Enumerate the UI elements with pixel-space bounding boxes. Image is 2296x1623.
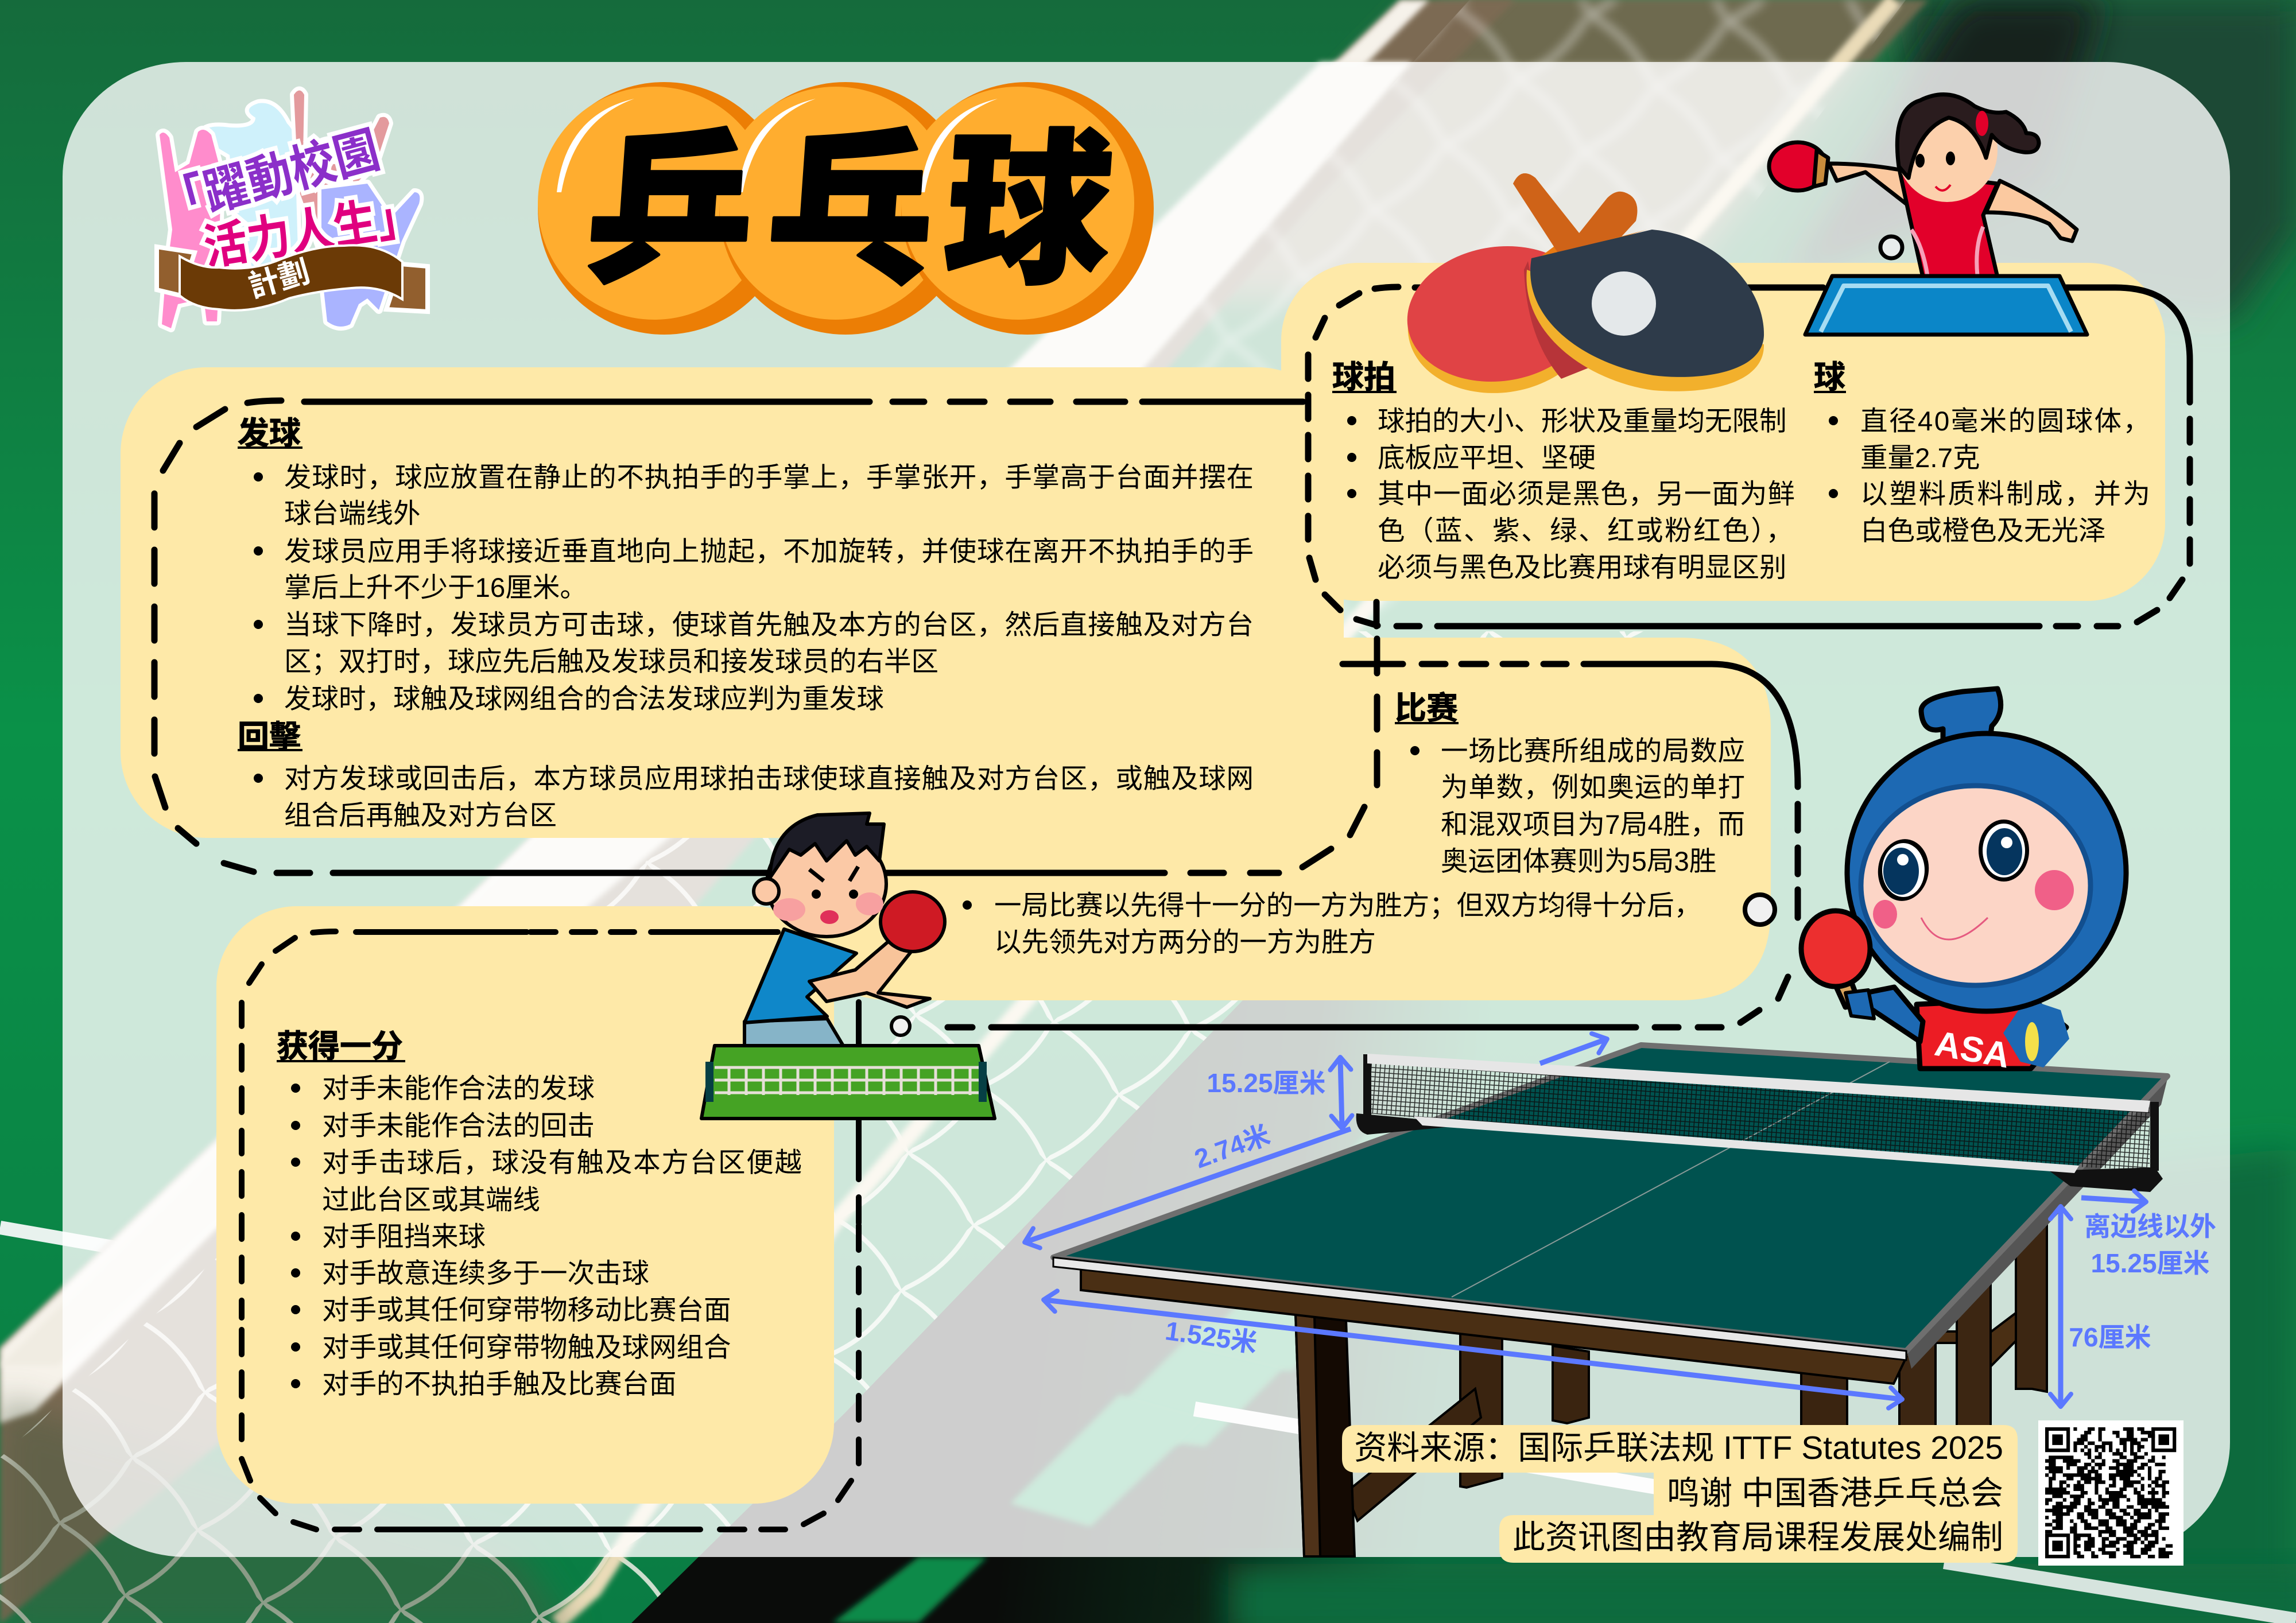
point rules list (291, 1074, 802, 1400)
ball (891, 1017, 910, 1035)
label: 1.525 m: 1.525米 (1163, 1315, 1259, 1358)
text block: racket (1332, 359, 1795, 583)
boy's arm (809, 935, 930, 1007)
table apron (1081, 1265, 1906, 1384)
label: 15.25 cm: 15.25厘米 (1207, 1068, 1326, 1098)
title text: 球 (940, 119, 1118, 304)
serve rules list: 发球员应用手将球接近垂直地向上抛起，不加旋转，并使球在离开不执拍手的手 (284, 537, 1254, 567)
return rules list: 对方发球或回击后，本方球员应用球拍击球使球直接触及对方台区，或触及球网 (284, 764, 1254, 794)
credits text: 鸣谢 中国香港乒乓总会 (1667, 1475, 2003, 1512)
mascot paddle (1801, 911, 1874, 1019)
centre line (1452, 1062, 1890, 1297)
match rules list: 一局比赛以先得十一分的一方为胜方；但双方均得十分后， (994, 891, 1701, 921)
mascot sleeve (2003, 999, 2069, 1067)
arrow: net overhang (2081, 1198, 2145, 1202)
point rules list: 对手或其任何穿带物触及球网组合 (322, 1333, 731, 1363)
text block: match (963, 690, 1745, 958)
label: beyond sideline 15.25 cm (2084, 1212, 2216, 1278)
ball rules list: 直径40毫米的圆球体， (1860, 406, 2150, 437)
mascot body (1917, 999, 2066, 1069)
ball 3 (901, 82, 1154, 335)
mascot arm (1851, 987, 1923, 1042)
title text (582, 119, 1118, 304)
point rules list: 对手或其任何穿带物移动比赛台面 (322, 1295, 731, 1326)
heading: match: 比赛 (1395, 690, 1458, 726)
mascot yellow cuff (2025, 1022, 2039, 1061)
girl's eyes and mouth (1915, 152, 1955, 191)
logo text: 躍動校園: 「躍動校園 (154, 121, 385, 234)
ball rules list: 白色或橙色及无光泽 (1860, 516, 2105, 546)
point rules list: 过此台区或其端线 (322, 1185, 540, 1216)
arrow: table width (1045, 1300, 1901, 1399)
return rules list: 组合后再触及对方台区 (284, 801, 557, 831)
arrow: table length far end (1540, 1039, 1606, 1063)
net top strip (1367, 1054, 2150, 1112)
serve rules list: 当球下降时，发球员方可击球，使球首先触及本方的台区，然后直接触及对方台 (284, 610, 1254, 640)
match rules list (963, 736, 1745, 958)
arrow: table length (1026, 1129, 1351, 1242)
heading: winning a point: 获得一分 (277, 1028, 403, 1064)
mascot hood knob (1921, 689, 2001, 746)
credits (1342, 1425, 2018, 1563)
table tennis table with net (1053, 1045, 2167, 1556)
match rules list: 以先领先对方两分的一方为胜方 (994, 927, 1376, 958)
heading: return: 回擊 (238, 719, 301, 755)
match rules list: 一场比赛所组成的局数应 (1441, 736, 1745, 767)
serve rules list: 区；双打时，球应先后触及发球员和接发球员的右半区 (284, 647, 938, 677)
black racket (1513, 173, 1764, 391)
ball rules list: 重量2.7克 (1860, 443, 1980, 473)
arrow: table height (2058, 1207, 2063, 1405)
logo banner (157, 246, 428, 312)
serve rules list: 发球时，球应放置在静止的不执拍手的手掌上，手掌张开，手掌高于台面并摆在 (284, 463, 1254, 493)
banner text: 計劃: 計劃 (245, 254, 313, 304)
point rules list: 对手的不执拍手触及比赛台面 (322, 1369, 676, 1400)
mascot eyes (1874, 820, 2029, 904)
net lines (715, 1067, 979, 1095)
match rules list: 为单数，例如奥运的单打 (1441, 772, 1745, 803)
label: 76 cm: 76厘米 (2069, 1322, 2151, 1352)
dashed outline: point scoring (242, 931, 859, 1529)
mascot shirt text: ASA (1932, 1024, 2012, 1076)
label: beyond sideline 15.25 cm: 离边线以外 (2084, 1212, 2216, 1241)
credits text: 资料来源：国际乒联法规 ITTF Statutes 2025 (1354, 1430, 2003, 1466)
panel: racket and ball (1281, 263, 2165, 601)
boy's paddle (881, 892, 945, 952)
racket rules list: 底板应平坦、坚硬 (1378, 443, 1596, 473)
mascot cheeks (1873, 870, 2074, 929)
icon: crossed rackets (1398, 173, 1764, 405)
point rules list: 对手未能作合法的发球 (322, 1074, 595, 1104)
racket rules list (1347, 406, 1795, 583)
serve rules list (254, 463, 1254, 715)
text block: serve (238, 416, 1254, 831)
racket rules list: 色（蓝、紫、绿、红或粉红色）， (1378, 516, 1793, 546)
dashed outline: serve and return (154, 401, 1377, 873)
mascot hood (1847, 733, 2126, 1011)
serve rules list: 掌后上升不少于16厘米。 (284, 573, 587, 603)
point rules list: 对手故意连续多于一次击球 (322, 1259, 649, 1289)
icon: girl player at blue table (1769, 95, 2087, 335)
boy's body (744, 929, 856, 1023)
ball 1 (538, 82, 790, 335)
serve rules list: 球台端线外 (284, 499, 420, 529)
heading: ball: 球 (1814, 359, 1845, 395)
logo text: 活力人生: 活力人生」 (200, 188, 424, 275)
text block: ball (1814, 359, 2150, 546)
girl's body (1900, 172, 1998, 277)
label: 2.74 m: 2.74米 (1190, 1119, 1274, 1174)
credits background (1342, 1425, 2018, 1563)
mascot with red paddle (1801, 689, 2126, 1076)
girl's stripes (1911, 227, 1983, 275)
panel: match rules (804, 638, 1771, 1000)
measurement arrows (1026, 1039, 2145, 1405)
boy's hair (770, 813, 884, 878)
dashed outline: match rules (948, 664, 1798, 1027)
front edge (1053, 1257, 1906, 1360)
title text: 乓 (762, 119, 940, 304)
green table (701, 1046, 995, 1119)
text block: point scoring (277, 1028, 802, 1400)
table top (1053, 1045, 2167, 1351)
panel: point scoring (216, 906, 834, 1504)
ball near mascot (1745, 895, 1775, 925)
blue table (1805, 276, 2087, 335)
heading: racket: 球拍 (1332, 359, 1395, 395)
title: table tennis on three balls (538, 82, 1154, 335)
QR code (2038, 1420, 2183, 1566)
racket rules list: 球拍的大小、形状及重量均无限制 (1378, 406, 1786, 437)
ball rules list (1829, 406, 2150, 546)
match rules list: 奥运团体赛则为5局3胜 (1441, 847, 1716, 877)
girl's other arm (1986, 181, 2077, 241)
girl's head (1896, 99, 1998, 202)
net bottom strip (1414, 1116, 2079, 1173)
table legs (1296, 1182, 2047, 1556)
icon: boy player with green table (701, 813, 995, 1119)
point rules list: 对手击球后，球没有触及本方台区便越 (322, 1148, 802, 1178)
credits text (1354, 1430, 2003, 1556)
table lines (1821, 286, 2071, 332)
mascot mouth (1921, 918, 1988, 939)
boy's head (767, 831, 886, 937)
match rules list: 和混双项目为7局4胜，而 (1441, 810, 1745, 840)
panel: serve and return (121, 367, 1344, 838)
point rules list: 对手阻挡来球 (322, 1222, 486, 1252)
mascot face (1861, 786, 2091, 985)
boy's ear (754, 879, 779, 904)
net posts and clamps (1356, 1054, 2163, 1192)
boy's face details (773, 867, 883, 924)
net mesh (1367, 1062, 2150, 1171)
label: beyond sideline 15.25 cm: 15.25厘米 (2091, 1248, 2210, 1278)
point rules list: 对手未能作合法的回击 (322, 1111, 595, 1141)
arrow: net height (1340, 1058, 1342, 1127)
dashed outline: racket and ball (1308, 287, 2190, 626)
girl's arm and paddle (1769, 142, 1917, 212)
racket rules list: 其中一面必须是黑色，另一面为鲜 (1378, 479, 1795, 510)
return rules list (254, 764, 1254, 831)
hair ties (1976, 111, 1988, 136)
ball rules list: 以塑料质料制成，并为 (1860, 479, 2150, 510)
racket rules list: 必须与黑色及比赛用球有明显区别 (1378, 553, 1786, 583)
serve rules list: 发球时，球触及球网组合的合法发球应判为重发球 (284, 684, 884, 715)
red racket (1398, 192, 1637, 405)
heading: serve: 发球 (238, 416, 301, 451)
table side posts (705, 1062, 987, 1102)
ball (1880, 236, 1902, 258)
girl's hair (1897, 95, 2039, 178)
logo: campus programme (154, 91, 428, 328)
credits text: 此资讯图由教育局课程发展处编制 (1512, 1519, 2003, 1556)
logo figures (160, 91, 420, 328)
boy's pants (744, 1019, 843, 1046)
ball 2 (719, 82, 972, 335)
title text: 乒 (582, 119, 760, 304)
